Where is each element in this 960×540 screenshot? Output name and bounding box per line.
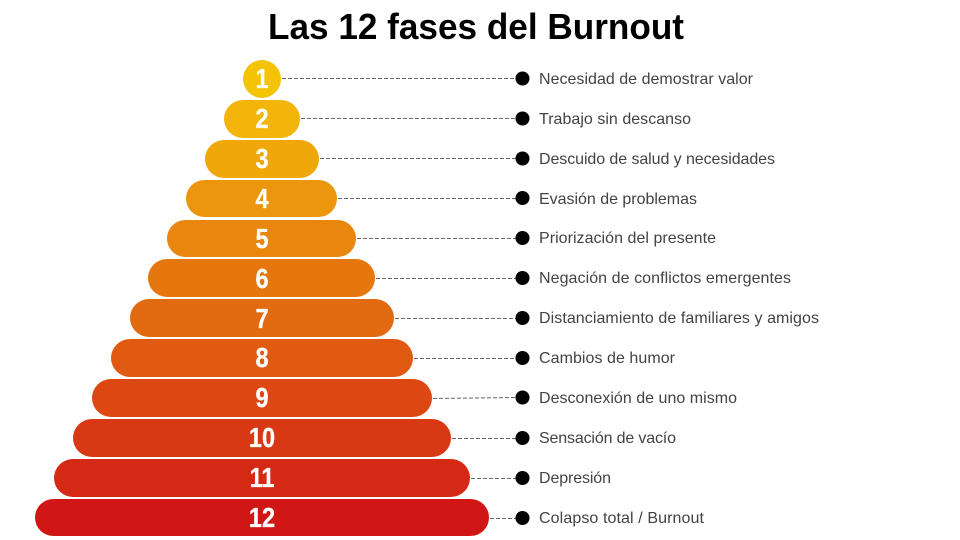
phase 10 (73, 419, 676, 457)
phase 10: 10 (249, 423, 275, 453)
phase 6: Negación de conflictos emergentes (539, 270, 791, 287)
phase 8: 8 (255, 343, 269, 373)
phase 6: 6 (255, 264, 269, 294)
phase 11: 11 (250, 463, 274, 493)
phase 10: Sensación de vacío (539, 430, 676, 447)
phase 3 (205, 140, 775, 178)
phase 4: 4 (255, 184, 269, 214)
phase 11: Depresión (539, 470, 611, 487)
phase 2: Trabajo sin descanso (539, 111, 691, 128)
phase 9: Desconexión de uno mismo (539, 390, 737, 407)
phase 3: Descuido de salud y necesidades (539, 151, 775, 168)
phase 2: 2 (255, 104, 269, 134)
title: Las 12 fases del Burnout (268, 6, 684, 47)
phase 4 (186, 180, 697, 217)
phase 8 (111, 339, 676, 377)
phase 7: Distanciamiento de familiares y amigos (539, 310, 819, 327)
phase 9: 9 (255, 383, 269, 413)
phase 5 (167, 220, 716, 257)
phase 8: Cambios de humor (539, 350, 676, 367)
phase 1: Necesidad de demostrar valor (539, 71, 754, 88)
phase 11 (54, 459, 611, 497)
phase 7: 7 (255, 304, 269, 334)
phase 4: Evasión de problemas (539, 191, 697, 208)
phase 3: 3 (255, 144, 269, 174)
phase 12: Colapso total / Burnout (539, 510, 705, 527)
phase 6 (148, 259, 791, 297)
phase 9 (92, 379, 737, 417)
phase 1: 1 (255, 64, 269, 94)
phase 12 (35, 499, 705, 536)
phase 7 (130, 299, 819, 337)
phase 5: 5 (255, 224, 269, 254)
phase 2 (224, 100, 691, 138)
phase 1 (243, 60, 754, 98)
phase 12: 12 (249, 503, 275, 533)
phase 5: Priorización del presente (539, 230, 716, 247)
